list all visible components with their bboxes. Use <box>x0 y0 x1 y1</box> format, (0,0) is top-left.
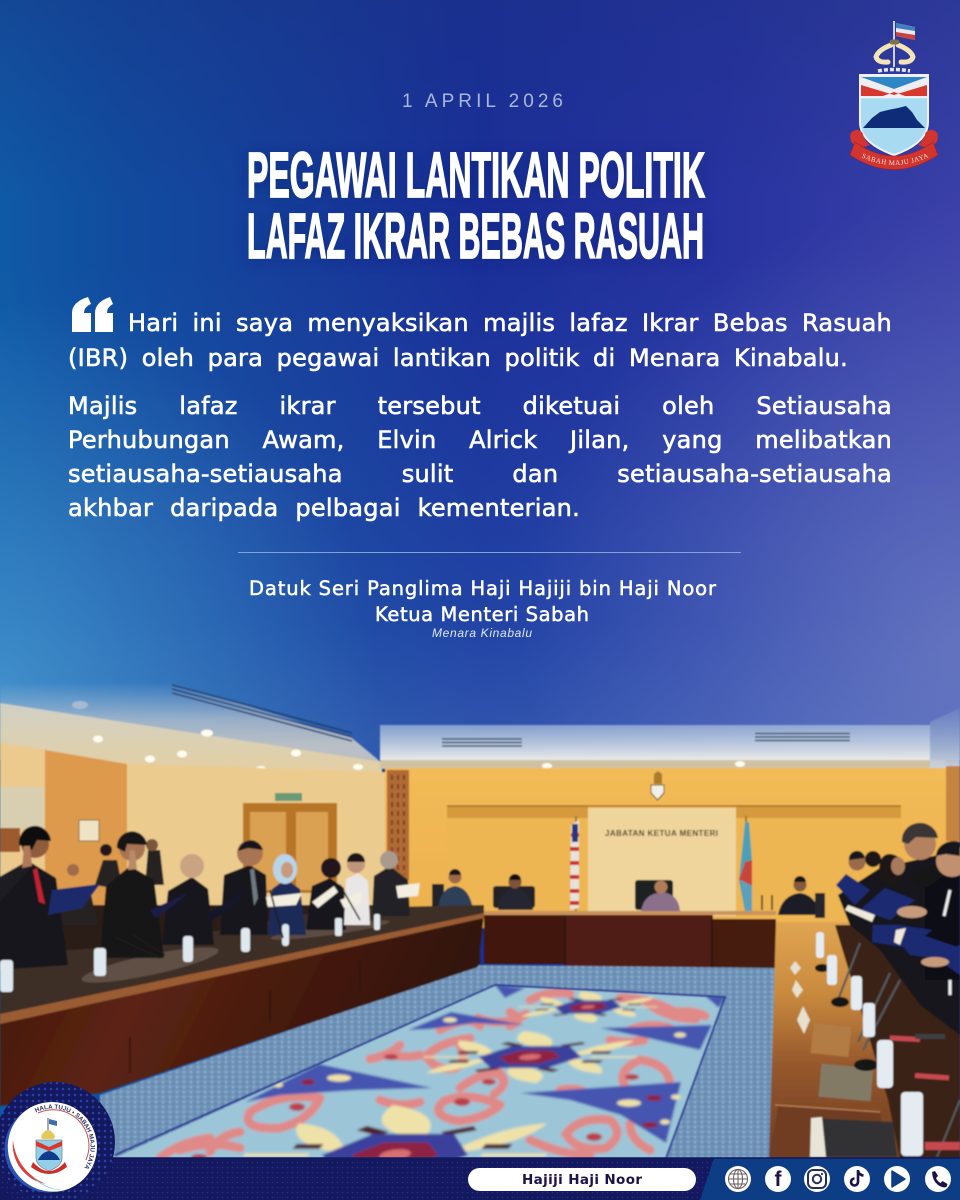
signature: name: Datuk Seri Panglima Haji Hajiji bin Haji Noor <box>249 577 717 600</box>
crest ribbon with motto <box>850 130 938 170</box>
crest: Sabah coat of arms, top right <box>850 21 938 170</box>
quote paragraph 2: Majlis lafaz ikrar tersebut diketuai oleh Setiausaha <box>68 392 892 420</box>
background seated officials <box>60 839 825 925</box>
quote paragraph 2: setiausaha-setiausaha sulit dan setiausaha-setiausaha <box>68 460 892 488</box>
footer bar <box>0 1158 960 1200</box>
crest flag <box>894 21 915 67</box>
rug blue side motifs <box>245 985 725 1143</box>
quote paragraph 2: Perhubungan Awam, Elvin Alrick Jilan, yang melibatkan <box>68 426 892 454</box>
rug pink ornaments <box>160 993 705 1158</box>
date: 1 APRIL 2026 <box>402 91 563 112</box>
icon: phone <box>925 1166 951 1192</box>
back table <box>478 911 776 975</box>
icon: website globe <box>725 1166 751 1192</box>
footer name pill <box>468 1168 696 1191</box>
badge crest <box>31 1118 67 1174</box>
icon: facebook <box>765 1166 791 1192</box>
quote paragraph 1: Hari ini saya menyaksikan majlis lafaz Ikrar Bebas Rasuah <box>128 309 892 337</box>
badge: Hala Tuju Sabah Maju Jaya <box>0 1082 115 1198</box>
crest hands <box>876 42 913 62</box>
open folders <box>48 883 420 922</box>
icon: youtube play <box>884 1166 910 1192</box>
signature: role: Ketua Menteri Sabah <box>375 603 589 626</box>
standing officials group, left <box>0 826 420 992</box>
left conference table <box>0 905 484 1106</box>
bottles on table <box>0 914 380 992</box>
icon: opening quotation mark <box>72 297 113 332</box>
icon: instagram <box>804 1166 830 1192</box>
flag: Sabah <box>739 816 752 912</box>
rug <box>116 986 724 1158</box>
icon: facebook: f <box>774 1168 782 1191</box>
quote paragraph 1: (IBR) oleh para pegawai lantikan politik di Menara Kinabalu. <box>68 344 848 372</box>
carpet <box>100 965 776 1160</box>
person 6 <box>306 858 346 930</box>
ceiling <box>0 682 960 773</box>
person 2 <box>100 831 164 958</box>
left walls and door <box>0 743 480 970</box>
person 3 <box>162 854 214 945</box>
right conference table <box>769 922 960 1158</box>
person 5 in hijab <box>268 854 306 935</box>
person 8 <box>372 851 410 916</box>
quote paragraph 2 <box>68 392 892 522</box>
crest shield <box>860 75 928 155</box>
person 7 in white <box>344 853 370 925</box>
person 1 <box>0 826 68 970</box>
standing officials group, right <box>836 823 960 1035</box>
wall crest <box>651 771 664 800</box>
footer name pill: Hajiji Haji Noor <box>522 1172 642 1188</box>
quote paragraph 1 <box>68 309 892 372</box>
crest ribbon with motto: SABAH MAJU JAYA <box>862 154 929 166</box>
divider <box>238 552 741 554</box>
photo: swearing-in ceremony in the meeting room <box>0 682 960 1200</box>
quote paragraph 2: akhbar daripada pelbagai kementerian. <box>68 494 580 522</box>
badge motto: HALA TUJU • SABAH MAJU JAYA <box>34 1104 95 1169</box>
right wall with recesses <box>385 766 960 928</box>
person 4 <box>220 840 268 935</box>
crest wreath <box>878 70 910 71</box>
wall sign: JABATAN KETUA MENTERI <box>605 829 718 838</box>
flag: Malaysia <box>570 816 579 912</box>
title <box>247 139 705 274</box>
icon: tiktok <box>844 1166 870 1192</box>
signature: location: Menara Kinabalu <box>432 626 532 640</box>
